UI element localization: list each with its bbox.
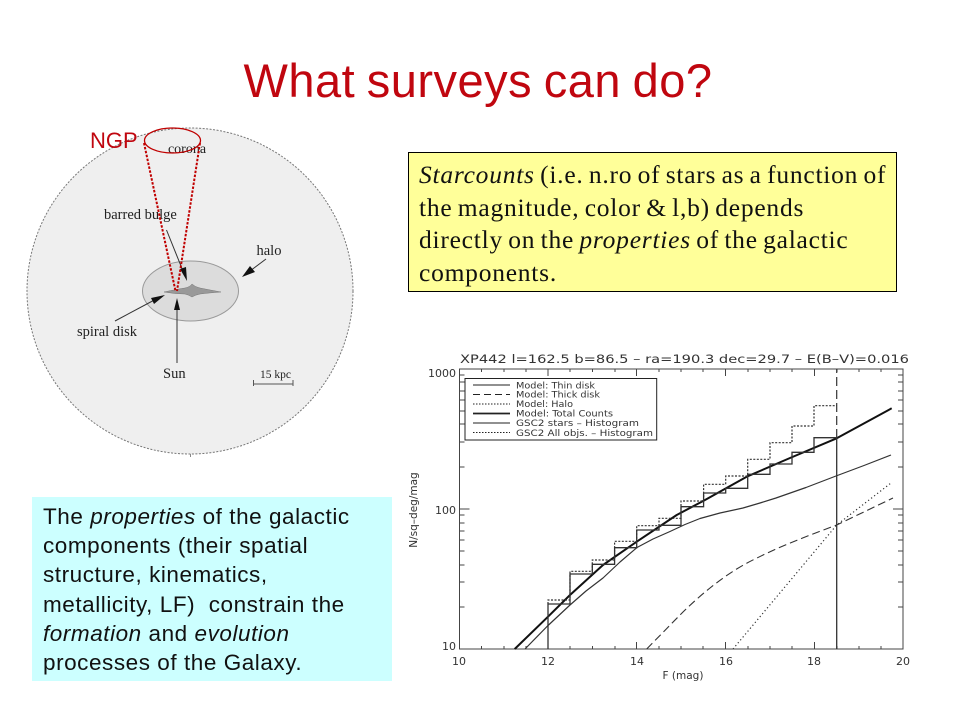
bulge ellipse	[142, 261, 238, 321]
x axis labels: 12	[541, 655, 555, 668]
model total counts	[515, 408, 892, 649]
plot frame and ticks	[460, 369, 903, 649]
halo circle	[27, 128, 353, 454]
histogram: stars	[548, 438, 837, 649]
legend: Model: Thick disk	[516, 390, 601, 400]
callout: starcounts	[408, 152, 897, 292]
arrow: halo	[242, 259, 266, 277]
NGP cone	[144, 128, 200, 291]
legend	[465, 378, 657, 440]
label: halo: halo	[256, 243, 281, 259]
histogram: all objects	[548, 406, 837, 604]
label: NGP: NGP	[90, 128, 138, 153]
spiral disk shape	[164, 284, 221, 297]
callout: starcounts: the magnitude, color & l,b) depends	[419, 192, 804, 222]
title: What surveys can do?	[244, 54, 712, 107]
magnitude limit line	[836, 369, 838, 438]
callout: starcounts: components.	[419, 258, 557, 286]
legend: Model: Total Counts	[516, 410, 613, 420]
x axis labels: 18	[807, 655, 821, 668]
x axis labels: 20	[896, 655, 910, 668]
legend: Model: Halo	[516, 400, 574, 410]
chart title: XP442 l=162.5 b=86.5 – ra=190.3 dec=29.7 – E(B–V)=0.016	[460, 352, 909, 366]
callout: starcounts: directly on the properties of the galactic	[419, 225, 848, 254]
x axis labels: 16	[719, 655, 733, 668]
x axis labels: 14	[630, 655, 644, 668]
scale bar	[254, 380, 293, 386]
x axis labels	[452, 655, 910, 668]
x axis title: F (mag)	[663, 670, 703, 682]
legend: Model: Thin disk	[516, 382, 596, 392]
y axis labels: 10	[442, 640, 456, 653]
callout: properties: metallicity, LF) constrain the	[43, 592, 345, 617]
callout: properties: formation and evolution	[43, 621, 290, 646]
y axis labels: 100	[435, 504, 456, 517]
legend: GSC2 All objs. – Histogram	[516, 429, 653, 439]
bottom tick	[190, 454, 192, 457]
label: scale: 15 kpc	[260, 369, 291, 381]
callout: properties: processes of the Galaxy.	[43, 650, 302, 675]
callout: properties	[32, 497, 392, 681]
label: Sun: Sun	[163, 366, 186, 382]
model thick disk	[647, 498, 893, 649]
arrow: spiral disk	[115, 295, 165, 321]
x axis labels: 10	[452, 655, 466, 668]
callout: properties: components (their spatial	[43, 533, 308, 558]
callout: properties: structure, kinematics,	[43, 562, 268, 587]
label: barred bulge: barred bulge	[104, 207, 177, 223]
model thin disk	[525, 455, 891, 649]
legend: GSC2 stars – Histogram	[516, 419, 639, 429]
y axis labels: 1000	[428, 367, 456, 380]
label: corona: corona	[168, 142, 207, 157]
arrow: Sun	[174, 298, 180, 363]
callout: starcounts: Starcounts (i.e. n.ro of stars as a function of	[419, 160, 886, 189]
model halo	[733, 483, 891, 649]
arrow: barred bulge	[166, 230, 187, 281]
callout: properties: The properties of the galactic	[43, 504, 350, 529]
label: spiral disk: spiral disk	[77, 324, 138, 340]
y axis labels	[428, 367, 456, 653]
y axis title: N/sq–deg/mag	[408, 472, 420, 548]
